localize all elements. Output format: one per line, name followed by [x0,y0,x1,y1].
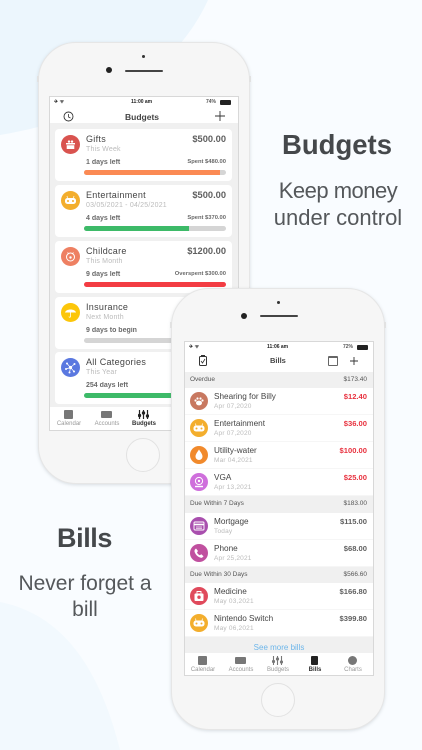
name: Entertainment [86,190,146,200]
tab: calendar: Calendar [191,667,215,673]
text: never forget: Never forget a [18,572,152,595]
heading: bills: Bills [57,523,112,553]
side button right [384,322,386,328]
icon [61,358,80,377]
tab: budgets: Budgets [267,667,289,673]
days: 254 days left [86,382,128,389]
history icon [64,112,74,122]
name: Shearing for Billy [214,392,276,401]
nav title: Budgets [125,112,159,122]
side button right [249,76,251,82]
amount: $100.00 [340,446,367,455]
days: 9 days to begin [86,327,137,334]
spent: Spent $370.00 [187,215,226,221]
name: Mortgage [214,517,249,526]
name: Insurance [86,302,128,312]
progress [84,170,226,175]
status bar [189,344,368,350]
tab: budgets [267,656,289,673]
tab: bills [309,656,322,673]
row: phone [185,540,373,567]
date: Mar 04,2021 [214,457,253,464]
row: nintendo [185,610,373,637]
speaker dot [142,55,145,58]
screen: budgets [49,96,239,431]
speaker dot [277,301,280,304]
date: May 03,2021 [214,598,254,605]
name: All Categories [86,357,146,367]
status bar [54,99,231,105]
name: Medicine [214,587,247,596]
amount: $25.00 [344,473,367,482]
card: childcare [55,241,232,293]
nav title: Bills [270,356,286,365]
progress [84,338,226,343]
icon [190,587,208,605]
name: Nintendo Switch [214,614,273,623]
card: entertainment [55,185,232,237]
tab: bills: Bills [309,667,321,673]
period: This Week [86,146,121,153]
side button left [37,76,39,82]
list background [50,123,238,407]
home button [261,683,295,717]
tab: calendar: Calendar [57,421,81,427]
date: May 06,2021 [214,625,254,632]
header: overdue: $173.40 [344,376,367,383]
header: 30 days: $566.60 [344,571,367,578]
text: never forget [18,572,152,621]
heading: budgets: Budgets [282,129,392,160]
plus icon [215,111,225,121]
status bar: 72% [343,344,353,350]
side button left [170,322,172,328]
home button [126,438,160,472]
calendar icon [328,356,338,366]
amount: $500.00 [192,190,226,200]
tab: calendar [57,410,81,427]
card: all categories [55,352,232,404]
icon [61,135,80,154]
tab: calendar [191,656,215,673]
speaker [125,70,163,72]
row: medicine [185,583,373,610]
amount: $500.00 [192,134,226,144]
icon [190,473,208,491]
camera [106,67,112,73]
date: Apr 07,2020 [214,430,252,437]
name: Phone [214,544,238,553]
amount: $399.80 [340,614,367,623]
tab bar [50,407,238,431]
tab: accounts [228,657,254,673]
days: 9 days left [86,271,120,278]
text: keep money: under control [274,205,402,230]
plus icon [350,357,358,365]
status bar: 11:00 am [131,99,152,105]
status bar: ✈ ᯤ [54,99,64,105]
phone: bills [171,288,385,730]
name: VGA [214,473,231,482]
spent: Overspent $300.00 [175,271,226,277]
amount: $68.00 [344,544,367,553]
camera [241,313,247,319]
row: vga [185,469,373,496]
progress [84,282,226,287]
card: gifts [55,129,232,181]
checklist icon [199,355,207,366]
name: Utility-water [214,446,257,455]
status bar: ✈ ᯤ [189,344,199,350]
header: overdue: Overdue [190,376,215,383]
icon [61,303,80,322]
period: Next Month [86,314,124,321]
progress [84,226,226,231]
row: mortgage [185,513,373,540]
name: Gifts [86,134,106,144]
name: Entertainment [214,419,265,428]
tab: budgets [132,410,156,427]
tab: charts: Charts [344,667,362,673]
text: keep money [274,178,402,230]
text: never forget: bill [72,598,98,621]
period: This Year [86,369,117,376]
date: Apr 13,2021 [214,484,252,491]
period: 03/05/2021 - 04/25/2021 [86,202,167,209]
amount: $12.40 [344,392,367,401]
header: overdue [185,372,373,388]
tab: charts [344,656,362,673]
screen: bills [184,341,374,676]
amount: $36.00 [344,419,367,428]
text: keep money: Keep money [279,178,397,203]
tab bar [185,653,373,676]
date: Apr 25,2021 [214,555,252,562]
amount: $1200.00 [187,246,226,256]
row: entertainment [185,415,373,442]
icon [190,419,208,437]
header: 30 days: Due Within 30 Days [190,571,247,578]
amount: $115.00 [340,517,367,526]
tab: budgets: Budgets [132,421,156,427]
speaker [260,315,298,317]
header: 7 days: $183.00 [344,500,367,507]
days: 1 days left [86,159,120,166]
icon [61,191,80,210]
amount: $166.80 [340,587,367,596]
header: 7 days: Due Within 7 Days [190,500,244,507]
row: shearing [185,388,373,415]
days: 4 days left [86,215,120,222]
period: This Month [86,258,123,265]
icon [190,446,208,464]
icon [61,247,80,266]
name: Childcare [86,246,127,256]
date: Today [214,528,232,535]
header: 7 days [185,496,373,513]
row: utility [185,442,373,469]
status bar: 74% [206,99,216,105]
phone: budgets [38,42,250,484]
icon [190,614,208,632]
tab: accounts: Accounts [95,421,119,427]
progress [84,393,226,398]
spent: Spent $480.00 [187,159,226,165]
card: insurance [55,297,232,349]
icon [190,544,208,562]
icon [190,517,208,535]
icon [190,392,208,410]
date: Apr 07,2020 [214,403,252,410]
header: 30 days [185,567,373,583]
status bar: 11:06 am [267,344,288,350]
see more bills: See more bills [254,643,304,652]
nav bar [50,107,238,129]
see more bills [185,637,373,653]
tab: accounts [94,411,120,427]
tab: accounts: Accounts [229,667,253,673]
